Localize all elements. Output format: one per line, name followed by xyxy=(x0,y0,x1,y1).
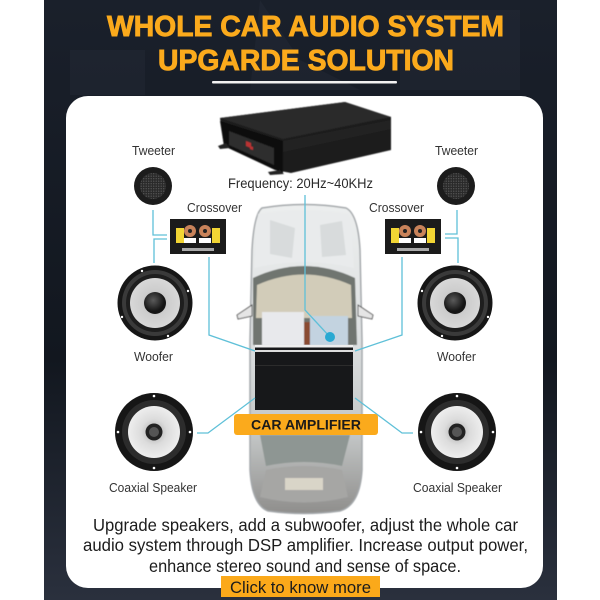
title xyxy=(107,11,504,77)
title underline xyxy=(212,81,397,84)
left coaxial speaker: Coaxial Speaker xyxy=(109,481,197,495)
right woofer xyxy=(418,266,492,364)
right tweeter xyxy=(435,144,478,205)
right tweeter: Tweeter xyxy=(435,144,478,158)
left woofer: Woofer xyxy=(134,350,173,364)
left tweeter xyxy=(132,144,175,205)
left crossover xyxy=(170,201,242,254)
left coaxial speaker xyxy=(109,393,197,495)
description text xyxy=(83,515,528,576)
left tweeter: Tweeter xyxy=(132,144,175,158)
car xyxy=(237,204,373,514)
car amplifier label: CAR AMPLIFIER xyxy=(251,416,361,432)
left woofer xyxy=(118,266,192,364)
description text: enhance stereo sound and sense of space. xyxy=(149,556,461,576)
button: Click to know more xyxy=(230,578,371,597)
right crossover: Crossover xyxy=(369,201,424,215)
connection dot xyxy=(325,332,335,342)
connection lines xyxy=(153,195,458,433)
label: frequency: Frequency: 20Hz~40KHz xyxy=(228,176,373,191)
amplifier in car xyxy=(255,345,353,410)
right crossover xyxy=(369,201,441,254)
description text: audio system through DSP amplifier. Increase output power, xyxy=(83,535,528,555)
title: WHOLE CAR AUDIO SYSTEM xyxy=(107,11,504,43)
amplifier product xyxy=(218,102,391,175)
right coaxial speaker xyxy=(413,393,502,495)
description text: Upgrade speakers, add a subwoofer, adjust the whole car xyxy=(93,515,518,535)
right woofer: Woofer xyxy=(437,350,476,364)
left crossover: Crossover xyxy=(187,201,242,215)
right coaxial speaker: Coaxial Speaker xyxy=(413,481,502,495)
panel: white card xyxy=(66,96,543,588)
car amplifier label xyxy=(234,414,378,435)
title: UPGARDE SOLUTION xyxy=(158,45,454,77)
